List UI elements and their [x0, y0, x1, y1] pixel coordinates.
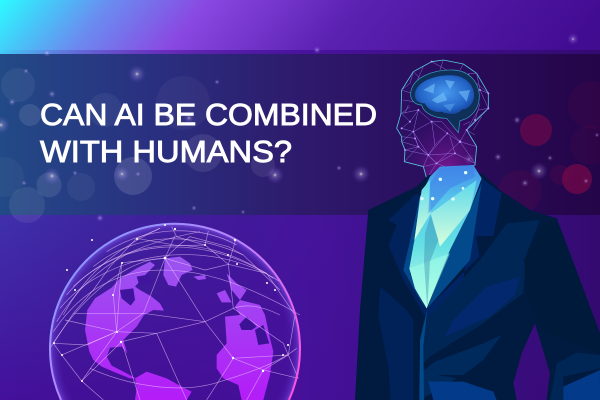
shirt lower sheen — [409, 253, 450, 308]
left jacket panel — [378, 287, 413, 400]
title: CAN AI BE COMBINED — [40, 98, 377, 132]
globe — [50, 224, 300, 400]
dark title band — [0, 54, 600, 215]
left lapel — [388, 193, 427, 317]
brain facets — [423, 80, 470, 112]
cuff highlight — [563, 370, 600, 400]
lapel edge — [403, 183, 482, 400]
brain bubble — [411, 70, 479, 133]
tie — [424, 215, 438, 308]
network mesh — [50, 227, 300, 400]
human figure — [355, 60, 600, 400]
right collar — [431, 180, 477, 247]
head wireframe — [397, 60, 489, 178]
right sleeve — [524, 218, 600, 353]
right lapel — [425, 178, 502, 320]
lower pocket — [428, 382, 497, 400]
continents — [85, 257, 273, 400]
chest sheen — [428, 165, 475, 213]
left collar — [414, 180, 431, 240]
facial mesh — [402, 60, 488, 178]
brain — [415, 75, 474, 114]
jacket base — [355, 173, 600, 400]
chest highlight — [445, 277, 520, 337]
right jacket panel — [420, 220, 540, 367]
suit — [355, 165, 600, 400]
bokeh circles — [0, 68, 600, 223]
lower pocket fold — [420, 335, 502, 400]
title: WITH HUMANS? — [40, 135, 292, 169]
head nodes — [401, 61, 489, 164]
globe rim — [50, 224, 300, 400]
globe sphere — [50, 224, 300, 400]
title — [40, 98, 377, 169]
sparkle lights — [0, 33, 600, 222]
cuff — [550, 353, 600, 400]
mesh nodes — [53, 224, 289, 382]
shirt lights — [420, 171, 467, 201]
head outline — [397, 60, 488, 178]
shirt — [409, 165, 482, 308]
